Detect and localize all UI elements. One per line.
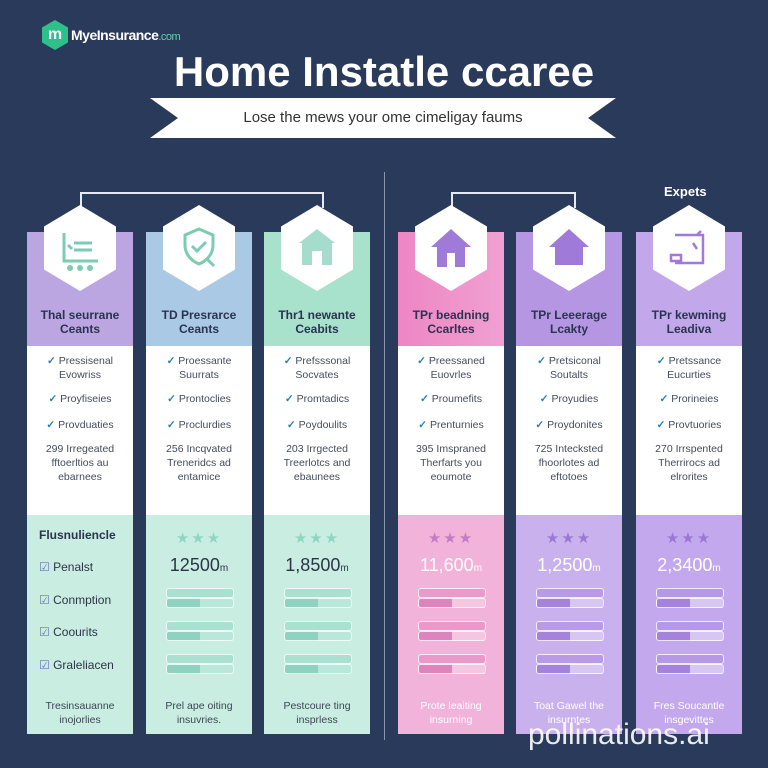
panel: column 6: ✓ Pretssance [657,355,721,367]
panel: column 4 [398,205,504,734]
panel: column 1: ebarnees [58,471,102,483]
panel: column 2: ✓ Proessante [167,355,231,367]
panel: column 1: Evowriss [59,369,101,381]
panel: column 5: insurntes [548,714,590,726]
panel: column 3: ★★★ [294,530,340,547]
panel: column 3: ✓ Poydoulits [287,419,347,431]
panel: column 6: Leadiva [667,322,711,336]
panel: column 1: ☑ Graleliacen [39,658,114,672]
panel: column 6: Fres Soucantle [654,700,724,712]
label: experts: Expets [664,184,707,199]
panel: column 6: ★★★ [666,530,712,547]
panel: column 2: Ceants [179,322,219,336]
panel: column 5: 1,2500m [537,555,601,575]
panel: column 5: fhoorlotes ad [539,457,599,469]
panel: column 4: ✓ Preessaned [417,355,485,367]
panel: column 1: ✓ Provduaties [46,419,114,431]
panel: column 3: Pestcoure ting [283,700,351,712]
panel: column 3: insprless [296,714,338,726]
panel: column 4: eoumote [431,471,471,483]
icon: shield [163,205,235,291]
panel: column 5: ★★★ [546,530,592,547]
icon: house purple 2 [533,205,605,291]
panel: column 3: ✓ Prefsssonal [284,355,350,367]
panel: column 5: eftotoes [550,471,588,483]
panel: column 1: Tresinsauanne [45,700,115,712]
panel: column 5: Soutalts [550,369,588,381]
panel: column 1: ☑ Penalst [39,560,93,574]
logo: m [48,26,62,43]
panel: column 6: ✓ Provtuories [657,419,721,431]
panel: column 2: Suurrats [179,369,219,381]
panel: column 2: TD Presrarce [162,308,236,322]
panel: column 6 [636,205,742,734]
panel: column 1: 299 Irregeated [46,443,114,455]
panel: column 3: Thr1 newante [278,308,356,322]
watermark: pollinations.ai [528,718,710,751]
panel: column 5: Lcakty [550,322,588,336]
ribbon subtitle: Lose the mews your ome cimeligay faums [243,109,523,126]
panel: column 1: fftoerltios au [51,457,108,469]
panel: column 3: ✓ Promtadics [285,393,349,405]
logo [42,20,180,50]
panel: column 2: Treneridcs ad [167,457,231,469]
panel: column 5: ✓ Pretsiconal [537,355,601,367]
panel: column 6: 2,3400m [657,555,721,575]
panel: column 6: insgevittes [664,714,714,726]
ribbon subtitle [150,98,616,138]
panel: column 1 [27,205,133,734]
panel: column 4: 11,600m [420,555,482,575]
panel: column 6: 270 Irrspented [655,443,723,455]
divider [384,172,385,740]
panel: column 2 [146,205,252,734]
panel: column 2: ★★★ [176,530,222,547]
panel: column 1: Flusnuliencle [39,528,116,542]
panel: column 4: Therfarts you [420,457,482,469]
panel: column 2: ✓ Prontoclies [167,393,231,405]
panel: column 3: ebaunees [294,471,340,483]
panel: column 4: ✓ Prenturnies [418,419,484,431]
panel: column 4: ✓ Proumefits [420,393,482,405]
panel: column 3: Socvates [295,369,339,381]
panel: column 1: ☑ Coourits [39,625,98,639]
icon: document [653,205,725,291]
panel: column 6: Therrirocs ad [658,457,720,469]
title: Home Instatle ccaree [174,48,594,95]
panel: column 3: 1,8500m [285,555,349,575]
panel: column 2: 12500m [170,555,228,575]
panel: column 6: TPr kewming [652,308,726,322]
panel: column 3: Treerlotcs and [284,457,350,469]
icon: house purple [415,205,487,291]
panel: column 6: Eucurties [667,369,711,381]
panel: column 3: 203 Irrgected [286,443,348,455]
panel: column 3: Ceabits [295,322,339,336]
panel: column 1: Ceants [60,322,100,336]
panel: column 1: inojorlies [59,714,101,726]
panel: column 4: TPr beadning [413,308,489,322]
icon: chart [44,205,116,291]
panel: column 1: ✓ Pressisenal [47,355,113,367]
panel: column 5: 725 Intecksted [535,443,603,455]
panel: column 4: insurning [430,714,472,726]
panel: column 1: Thal seurrane [41,308,119,322]
connector right [451,192,576,208]
panel: column 4: ★★★ [428,530,474,547]
connector left [80,192,324,208]
panel: column 4: Euovrles [431,369,471,381]
panel: column 5 [516,205,622,734]
panel: column 4: Ccarltes [427,322,475,336]
panel: column 4: 395 Imspraned [416,443,486,455]
panel: column 2: insuvries. [177,714,221,726]
panel: column 3 [264,205,370,734]
panel: column 2: 256 Incqvated [166,443,232,455]
panel: column 5: TPr Leeerage [531,308,607,322]
panel: column 4: Prote leaiting [420,700,482,712]
panel: column 6: elrorites [670,471,708,483]
panel: column 2: ✓ Proclurdies [167,419,231,431]
panel: column 1: ✓ Proyfiseies [48,393,112,405]
panel: column 2: entamice [178,471,220,483]
panel: column 1: ☑ Conmption [39,593,111,607]
panel: column 2: Prel ape oiting [165,700,233,712]
panel: column 5: ✓ Proyudies [540,393,598,405]
icon: house [281,205,353,291]
panel: column 6: ✓ Prorineies [659,393,718,405]
panel: column 5: ✓ Proydonites [535,419,603,431]
panel: column 5: Toat Gawel the [534,700,604,712]
logo: MyeInsurance.com [71,27,180,43]
